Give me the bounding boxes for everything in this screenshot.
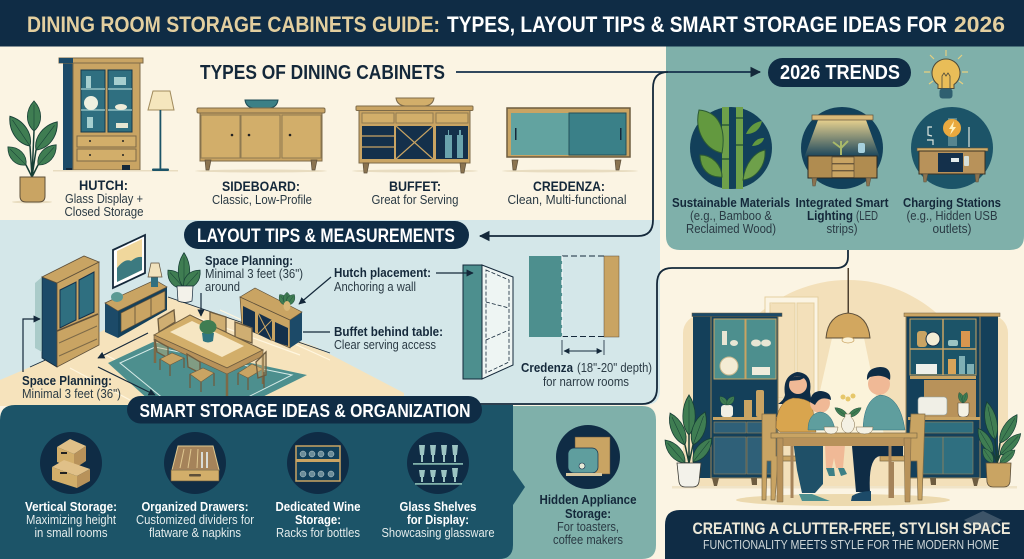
panel: 2026 trends xyxy=(672,50,1001,236)
label: integrated smart lighting: Integrated Smart xyxy=(796,195,889,210)
title banner: 2026 xyxy=(954,12,1005,37)
panel: layout tips background xyxy=(0,220,660,405)
label: charging stations xyxy=(903,195,1001,236)
icon: light bulb xyxy=(924,50,968,98)
label: credenza depth xyxy=(521,360,652,389)
arrow: trends to layout xyxy=(480,72,668,236)
heading pill: smart storage xyxy=(127,396,482,424)
label: hidden appliance: Storage: xyxy=(565,506,611,521)
label: wine storage: Dedicated Wine xyxy=(276,499,360,514)
icon: potted plant xyxy=(4,101,63,204)
child xyxy=(808,391,847,476)
rug xyxy=(108,342,307,396)
label: credenza depth: for narrow rooms xyxy=(543,374,629,389)
label: vertical storage xyxy=(25,499,117,540)
label: integrated smart lighting xyxy=(796,195,889,236)
arrow: space planning lower xyxy=(23,319,40,372)
iso table and chairs xyxy=(153,309,267,396)
label: integrated smart lighting: strips) xyxy=(826,221,858,236)
floor line xyxy=(672,486,1017,488)
label: charging stations: Charging Stations xyxy=(903,195,1001,210)
label: wine storage xyxy=(276,499,360,540)
icon: credenza xyxy=(502,108,638,172)
label: sideboard xyxy=(212,178,312,207)
iso buffet xyxy=(240,288,302,348)
iso shadow left of hutch xyxy=(35,277,42,352)
label: hidden appliance: coffee makers xyxy=(553,532,623,547)
heading: types: TYPES OF DINING CABINETS xyxy=(200,62,445,84)
label: vertical storage: Vertical Storage: xyxy=(25,499,117,514)
label: hutch: Glass Display + xyxy=(65,191,143,206)
label: hidden appliance: For toasters, xyxy=(557,519,619,534)
arrow: trends to storage connector xyxy=(470,250,848,404)
label: credenza: CREDENZA: xyxy=(533,178,605,194)
icon: floor lamp xyxy=(148,91,174,171)
label: buffet: BUFFET: xyxy=(389,178,441,194)
callout: space planning lower: Space Planning: xyxy=(22,373,112,388)
left plant xyxy=(661,395,716,487)
label: glass shelves: Showcasing glassware xyxy=(382,525,494,540)
label: sustainable materials: (e.g., Bamboo & xyxy=(690,208,772,223)
label: organized drawers: flatware & napkins xyxy=(149,525,241,540)
callout: buffet behind table: Clear serving access xyxy=(334,337,436,352)
light cone xyxy=(810,338,884,435)
panel: layout tips and measurements xyxy=(0,221,652,410)
pendant lamp xyxy=(826,268,870,343)
callout: hutch placement xyxy=(334,265,431,294)
right cabinet xyxy=(904,313,1000,486)
panel: 2026 trends background xyxy=(666,46,1024,250)
iso sideboard xyxy=(105,263,167,338)
arrow: space planning down xyxy=(200,293,202,316)
label: organized drawers xyxy=(136,499,255,540)
wall picture xyxy=(113,235,145,288)
callout: buffet behind table: Buffet behind table: xyxy=(334,324,443,339)
label: hutch: Closed Storage xyxy=(64,204,144,219)
left cabinet xyxy=(692,313,782,486)
iso plant xyxy=(168,252,200,303)
callout: space planning top: Minimal 3 feet (36") xyxy=(205,266,303,281)
heading pill: 2026 trends: 2026 TRENDS xyxy=(780,62,900,84)
label: charging stations: outlets) xyxy=(932,221,972,236)
icon: toaster xyxy=(556,425,620,489)
front chair left xyxy=(155,340,184,376)
icon: drawer xyxy=(164,432,226,494)
iso hutch xyxy=(42,256,99,367)
panel: smart storage ideas xyxy=(0,396,525,559)
panel: types of dining cabinets xyxy=(4,58,638,219)
heading pill: layout tips xyxy=(184,221,469,249)
label: sideboard: SIDEBOARD: xyxy=(222,178,300,194)
panel: hidden appliance background xyxy=(500,406,656,559)
callout: space planning top xyxy=(205,253,303,294)
label: organized drawers: Customized dividers for xyxy=(136,512,255,527)
label: hutch: HUTCH: xyxy=(79,177,128,193)
table shadow xyxy=(736,494,950,506)
callout: buffet behind table xyxy=(334,324,443,352)
label: charging stations: (e.g., Hidden USB xyxy=(906,208,998,223)
callout: hutch placement: Hutch placement: xyxy=(334,265,431,280)
label: credenza depth: (18"-20" depth) xyxy=(577,360,652,375)
label: wine storage: Storage: xyxy=(295,512,341,527)
label: sustainable materials: Reclaimed Wood) xyxy=(686,221,776,236)
label: hutch xyxy=(64,177,144,219)
label: credenza: Clean, Multi-functional xyxy=(508,192,627,207)
panel: hidden appliance storage xyxy=(540,425,636,547)
illustration: isometric dining room xyxy=(0,235,404,410)
woman xyxy=(776,372,830,501)
label: buffet xyxy=(372,178,458,207)
label: glass shelves: Glass Shelves xyxy=(400,499,476,514)
callout: space planning top: around xyxy=(205,279,240,294)
label: hidden appliance: Hidden Appliance xyxy=(540,492,636,507)
label: credenza xyxy=(508,178,627,207)
label: sustainable materials: Sustainable Materials xyxy=(672,195,790,210)
line: buffet leader xyxy=(303,331,330,333)
icon: buffet with wine rack xyxy=(352,98,478,173)
banner: clutter-free tagline xyxy=(665,510,1024,559)
chairs xyxy=(762,414,925,500)
man xyxy=(851,367,905,501)
front chair middle xyxy=(187,354,214,392)
title banner xyxy=(0,0,1024,46)
front chair right xyxy=(238,352,266,390)
arrow: to hutch side view xyxy=(436,272,473,274)
arrow: hutch placement xyxy=(299,277,331,304)
callout: space planning lower xyxy=(22,373,121,401)
double arrows xyxy=(98,333,155,395)
window xyxy=(765,297,818,400)
title banner: TYPES, LAYOUT TIPS & SMART STORAGE IDEAS FOR xyxy=(447,12,947,37)
arrow: types to trends xyxy=(456,71,760,73)
title banner: DINING ROOM STORAGE CABINETS GUIDE: xyxy=(27,12,440,37)
diagram: credenza depth top view xyxy=(529,256,619,355)
label: buffet: Great for Serving xyxy=(372,192,458,207)
callout: space planning lower: Minimal 3 feet (36") xyxy=(22,386,121,401)
icon: wine rack xyxy=(287,432,349,494)
vase and bowls xyxy=(824,394,873,434)
warm backdrop xyxy=(683,280,1008,486)
icon: boxes xyxy=(40,432,102,494)
callout: hutch placement: Anchoring a wall xyxy=(334,279,416,294)
label: organized drawers: Organized Drawers: xyxy=(142,499,248,514)
label: wine storage: Racks for bottles xyxy=(276,525,360,540)
icon: glass shelves xyxy=(407,432,469,494)
label: sustainable materials xyxy=(672,195,790,236)
label: glass shelves xyxy=(382,499,494,540)
heading pill: layout tips: LAYOUT TIPS & MEASUREMENTS xyxy=(197,226,455,247)
icon: hutch cabinet xyxy=(53,58,178,172)
label: sideboard: Classic, Low-Profile xyxy=(212,192,312,207)
icon: smart lighting xyxy=(801,107,883,189)
label: integrated smart lighting: Lighting xyxy=(807,208,853,223)
label: credenza depth: Credenza xyxy=(521,360,574,375)
illustration: family dining scene xyxy=(664,268,1022,506)
icon: bamboo xyxy=(690,107,772,189)
table xyxy=(771,433,917,502)
label: vertical storage: Maximizing height xyxy=(26,512,116,527)
diagram: hutch side view xyxy=(463,265,513,379)
right plant xyxy=(974,401,1024,487)
icon: sideboard xyxy=(195,100,327,172)
label: integrated smart lighting: (LED xyxy=(856,208,878,223)
label: glass shelves: for Display: xyxy=(407,512,469,527)
heading pill: smart storage: SMART STORAGE IDEAS & ORGANIZATION xyxy=(140,401,470,421)
icon: charging station xyxy=(911,107,993,189)
label: vertical storage: in small rooms xyxy=(34,525,108,540)
callout: space planning top: Space Planning: xyxy=(205,253,293,268)
label: hidden appliance xyxy=(540,492,636,547)
heading pill: 2026 trends xyxy=(768,58,911,87)
